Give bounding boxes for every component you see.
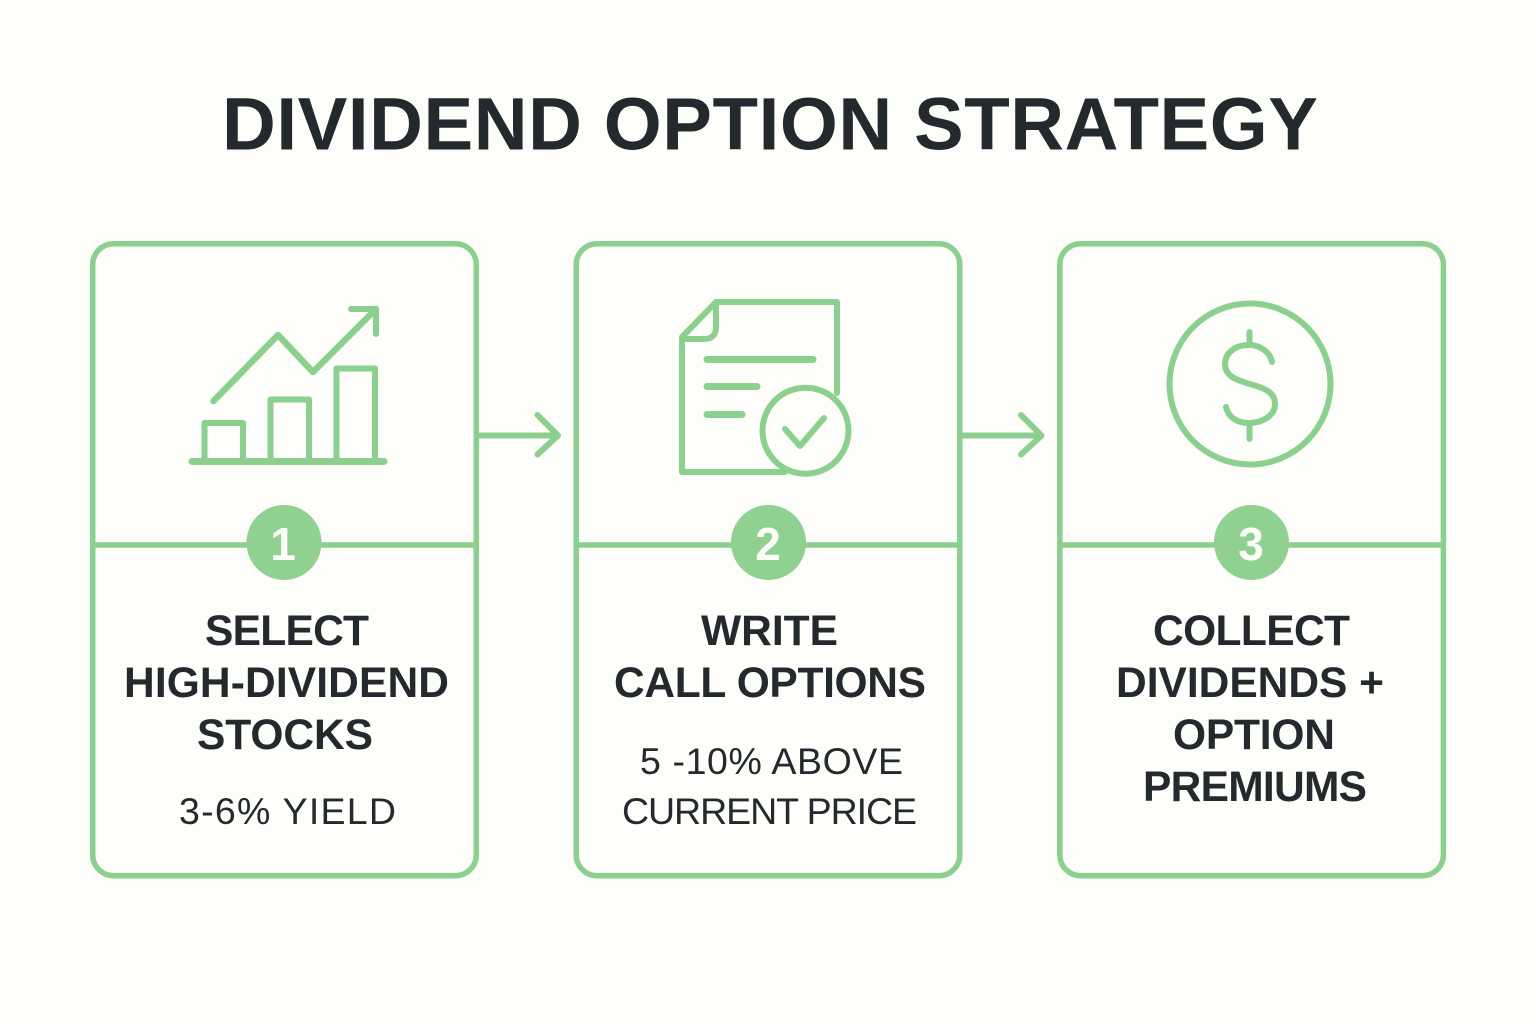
step number badge 3 bbox=[1214, 505, 1289, 580]
step 2 heading bbox=[614, 608, 926, 707]
divider 3 bbox=[1060, 542, 1443, 548]
step 2 heading: CALL OPTIONS bbox=[614, 660, 926, 707]
step number badge 2 bbox=[731, 505, 806, 580]
divider 2 bbox=[576, 542, 960, 548]
step 1 heading: HIGH-DIVIDEND bbox=[124, 660, 449, 707]
step number badge 1: 1 bbox=[270, 518, 296, 570]
arrow: step 2 to step 3 bbox=[962, 415, 1042, 454]
step 1 heading: STOCKS bbox=[197, 712, 373, 759]
step 1 heading: SELECT bbox=[205, 608, 369, 655]
step number badge 3: 3 bbox=[1238, 518, 1264, 570]
step 2 detail: 5 -10% ABOVE bbox=[640, 740, 903, 782]
panel: step 2 write calls bbox=[576, 244, 960, 876]
panel: step 3 collect income bbox=[1060, 244, 1443, 876]
step 2 detail bbox=[622, 740, 917, 832]
step 3 heading bbox=[1116, 608, 1384, 811]
card frame 3 bbox=[1060, 244, 1443, 876]
panel: step 1 select stocks bbox=[93, 244, 476, 876]
title: DIVIDEND OPTION STRATEGY bbox=[222, 82, 1318, 166]
step number badge 2: 2 bbox=[755, 518, 781, 570]
step 1 detail: 3-6% YIELD bbox=[179, 790, 396, 832]
step 3 heading: PREMIUMS bbox=[1143, 764, 1367, 811]
step 3 heading: DIVIDENDS + bbox=[1116, 660, 1384, 707]
step 3 heading: OPTION bbox=[1173, 712, 1335, 759]
icon: dollar coin bbox=[1170, 304, 1330, 464]
icon: growth chart with bars bbox=[192, 309, 384, 462]
card frame 2 bbox=[576, 244, 960, 876]
divider 1 bbox=[93, 542, 476, 548]
arrow: step 1 to step 2 bbox=[479, 415, 558, 454]
icon: document with check mark bbox=[682, 302, 848, 474]
step 3 heading: COLLECT bbox=[1153, 608, 1350, 655]
step 2 detail: CURRENT PRICE bbox=[622, 790, 917, 832]
card frame 1 bbox=[93, 244, 476, 876]
step number badge 1 bbox=[246, 505, 322, 580]
step 2 heading: WRITE bbox=[701, 608, 838, 655]
step 1 heading bbox=[124, 608, 449, 759]
